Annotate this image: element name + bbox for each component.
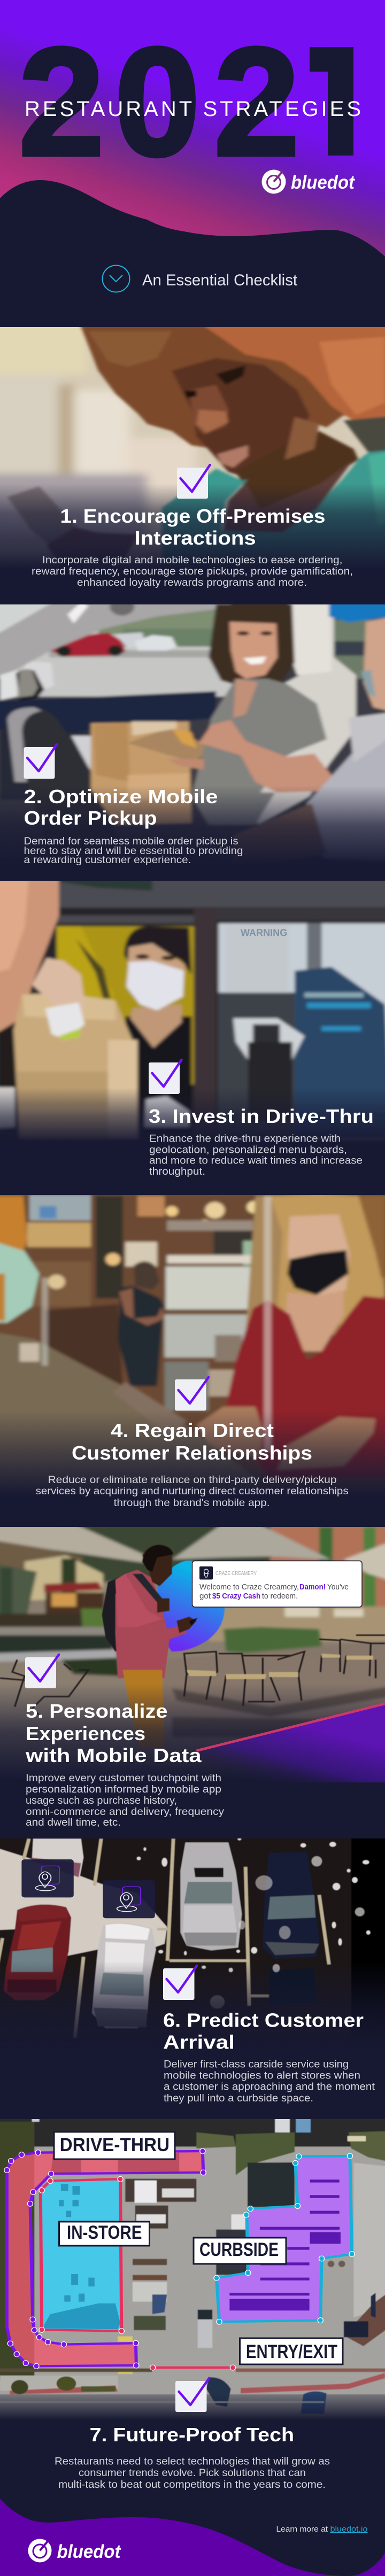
icon: checkbox [163,1966,197,2000]
heading [24,786,218,829]
icon: checkbox [25,1655,59,1688]
notification message: Welcome to Craze Creamery, [199,1582,299,1592]
purple light streak [194,1703,385,1782]
body text: enhanced loyalty rewards programs and more. [77,577,307,588]
icon: checkbox [175,2378,209,2412]
label: entry/exit [240,2338,343,2364]
heading: 2. Optimize Mobile [24,786,218,808]
brand name: CRAZE CREAMERY [215,1571,257,1577]
label: curbside: CURBSIDE [199,2239,279,2260]
body text: Incorporate digital and mobile technologies to ease ordering, [42,555,342,566]
logo: bluedot: bluedot [57,2541,121,2562]
checklist label: An Essential Checklist [142,271,298,289]
body text: a rewarding customer experience. [24,855,191,866]
curbside zone [214,2153,355,2324]
heading: 1. Encourage Off-Premises [60,505,325,527]
link text: Learn more at [276,2525,328,2534]
icon: location pin 2 [103,1880,155,1918]
panel: 5 personalize experiences [0,1520,385,1848]
notification message: You've [327,1582,349,1592]
photo: parking lot from above [0,1838,385,2038]
heading: 3. Invest in Drive-Thru [149,1105,374,1127]
notification message: got [199,1592,211,1601]
dark fade overlay [0,604,385,881]
dark wave [0,180,385,331]
notification message: to redeem. [262,1592,298,1601]
heading: Experiences [26,1722,145,1744]
entry/exit line [150,2365,235,2370]
panel: 1 encourage off-premises [0,327,385,588]
body text: a customer is approaching and the moment [164,2081,375,2093]
photo: man in plaza with phone [0,1527,385,1768]
body text: usage such as purchase history, [26,1795,177,1806]
body text [32,555,353,588]
icon: checkbox [149,1060,182,1094]
panel: 4 direct customer relationships [0,1180,385,1527]
notification message: $5 Crazy Cash [212,1592,260,1601]
icon: location pin 1 [21,1859,74,1897]
photo: woman with phone [0,327,385,563]
heading [60,505,325,549]
in-store zone [39,2176,124,2334]
label: in-store: IN-STORE [67,2222,142,2243]
body text: Reduce or eliminate reliance on third-party delivery/pickup [48,1475,337,1486]
body text: throughput. [149,1166,205,1177]
body text: here to stay and will be essential to providing [24,845,243,857]
body text: omni-commerce and delivery, frequency [26,1806,225,1818]
icon: checkbox [177,465,210,499]
body text: Restaurants need to select technologies that will grow as [55,2456,330,2467]
body text: they pull into a curbside space. [164,2093,313,2104]
body text: multi-task to beat out competitors in the years to come. [58,2479,326,2490]
dark fade overlay [0,1838,385,2119]
dark fade overlay [0,1195,385,1527]
warning sign text in window: WARNING [241,928,287,938]
heading: 4. Regain Direct [111,1419,274,1441]
body text: geolocation, personalized menu boards, [149,1145,347,1155]
notification card [192,1561,362,1607]
photo: aerial site map [0,2111,385,2442]
body text: Deliver first-class carside service using [164,2059,349,2070]
footer [0,2499,385,2576]
heading [163,2009,364,2053]
panel: 2 mobile order pickup [0,604,385,865]
dark fade overlay [0,881,385,1195]
panel: 7 future-proof tech [0,2111,385,2490]
heading: 6. Predict Customer [163,2009,364,2031]
icons: location pins [21,1859,155,1918]
body text: and dwell time, etc. [26,1817,121,1828]
dark fade overlay [0,1527,385,1838]
body text: mobile technologies to alert stores when [164,2070,360,2081]
heading: Order Pickup [24,807,157,829]
heading: Customer Relationships [72,1442,312,1464]
dark fade overlay [0,327,385,604]
body text [55,2456,330,2490]
falling snow specks [136,1837,371,2008]
heading: with Mobile Data [25,1744,202,1766]
notification message: Damon! [299,1582,326,1592]
label: entry/exit: ENTRY/EXIT [246,2341,337,2362]
panel: 6 predict customer arrival [0,1822,385,2140]
body text: Enhance the drive-thru experience with [149,1133,341,1145]
heading: 7. Future-Proof Tech [90,2424,294,2446]
panel: 3 drive-thru [0,881,385,1177]
body text: through the brand's mobile app. [114,1498,270,1509]
label: curbside [194,2238,286,2264]
title: 2021: 202 [19,16,299,188]
title: 2021: 1 [296,16,382,188]
header: hero banner [0,0,385,293]
subtitle: restaurant strategies: RESTAURANT STRATEGIES [25,97,361,121]
blue circle behind man [157,1561,225,1651]
icon: checkbox [175,1377,209,1411]
heading: Arrival [163,2031,235,2053]
logo: bluedot: bluedot [291,172,355,193]
body text: Demand for seamless mobile order pickup is [24,836,238,847]
photo: drive-thru window handoff [0,881,385,1139]
title: 2021 [22,45,353,158]
logo: bluedot [262,170,355,193]
body text: consumer trends evolve. Pick solutions that can [79,2468,306,2479]
app icon [199,1566,213,1580]
body text [24,836,243,866]
link text: bluedot.io [330,2525,368,2534]
drive-thru zone [4,2148,206,2369]
icon: checkbox [24,744,57,779]
photo: couple in car [0,604,385,858]
body text: reward frequency, encourage store pickups, provide gamification, [32,566,353,577]
body text: and more to reduce wait times and increase [149,1155,363,1166]
heading: Interactions [135,527,256,549]
heading [25,1700,202,1766]
heading [72,1419,312,1464]
body text: personalization informed by mobile app [26,1784,221,1795]
body text [149,1133,363,1177]
body text [164,2059,375,2104]
icon: chevron circle [103,265,129,292]
body text [26,1773,225,1828]
hero gradient background [0,0,385,267]
label: drive-thru: DRIVE-THRU [60,2135,170,2155]
heading: 5. Personalize [26,1700,168,1722]
body text: services by acquiring and nurturing direct customer relationships [36,1486,349,1497]
dark fade overlay [0,2119,385,2440]
photo: masked woman at counter [0,1195,385,1489]
body text: Improve every customer touchpoint with [26,1773,221,1784]
logo: bluedot [28,2539,121,2562]
body text [36,1475,349,1509]
footer purple wave [0,2499,385,2576]
